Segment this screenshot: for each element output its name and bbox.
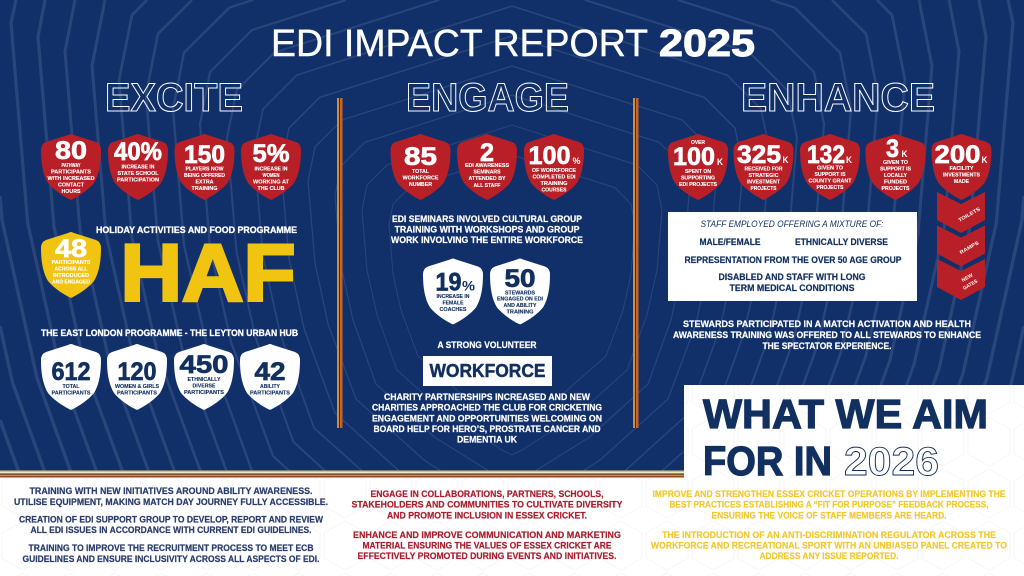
text: stewards [673,319,981,351]
stat: 100% training: COURSES [542,188,567,194]
heading: what we aim for in 2026 [703,391,988,484]
stat: 40% state school: INCREASE IN [122,164,155,170]
stat: 200k: MADE [954,179,970,185]
stat: 450 ethnically diverse: 450 [180,351,228,379]
column dividers [337,98,638,428]
stat: 120 women and girls: WOMEN & GIRLS [115,384,160,390]
heading: what we aim for in 2026: 2026 [844,440,939,484]
title: 2025 [659,23,755,65]
stat: 200k: 200 [934,141,980,169]
staff box [668,212,917,301]
stat: 200k: K [982,155,988,165]
stat: 200k: INVESTMENTS [943,172,981,178]
stat: over 100k: 100 [673,143,715,171]
stat: 19% female coaches: % [462,278,476,294]
stat: 42 ability: ABILITY [260,384,281,390]
stat: 3k: K [902,149,908,159]
text: yellow aims [651,489,1007,561]
heading: enhance: ENHANCE [741,76,935,120]
stat: 19% female coaches: COACHES [440,307,467,313]
chevron: new gates [937,259,985,300]
text: red aims: AND PROMOTE INCLUSION IN ESSEX CRICKET. [387,510,587,520]
text: navy aims: GUIDELINES AND ENSURE INCLUSIVITY ACROSS ALL ASPECTS OF EDI. [22,554,320,564]
stat: 80 pathway participants: WITH INCREASED [48,176,95,182]
stat: 80 pathway participants: PARTICIPANTS [51,170,92,176]
heading: what we aim for in 2026: WHAT WE AIM [703,391,988,437]
text: yellow aims: WORKFORCE AND RECREATIONAL SPORT WITH AN UNBIASED PANEL CREATED TO [651,540,1007,550]
stat: 450 ethnically diverse: DIVERSE [192,384,216,390]
heading: excite: EXCITE [105,76,243,120]
stat: 100% training [524,134,584,200]
stat: 132k: SUPPORT IS [814,172,846,178]
stat: 450 ethnically diverse [174,344,234,410]
stat: 150 players: EXTRA [196,180,214,186]
stat: 19% female coaches: 19 [436,268,462,296]
stat: 325k: PROJECTS [750,186,777,192]
stat: 80 pathway participants: CONTACT [58,182,84,188]
stat: 5% women: WOMEN [262,173,280,179]
stat: 48 participants: ACROSS ALL [54,266,88,272]
stat: 48 participants: AND ENGAGED [52,280,90,286]
chevron: ramps [937,226,985,266]
stat: 3k: GIVEN TO [883,160,908,166]
text: yellow aims: THE INTRODUCTION OF AN ANTI-DISCRIMINATION REGULATOR ACROSS THE [662,530,996,540]
stat: 5% women: 5% [252,140,290,168]
stat: 85 workforce: TOTAL [412,169,429,175]
chevron: toilets [937,192,985,233]
stat: 150 players [174,134,234,200]
stat: 40% state school: PARTICIPATION [117,178,159,184]
stat: 450 ethnically diverse: PARTICIPANTS [184,390,225,396]
text: edi seminars [391,214,583,245]
stripe band [0,470,684,478]
workforce callout [423,356,552,386]
stat: 19% female coaches: FEMALE [442,300,464,306]
text: red aims: ENHANCE AND IMPROVE COMMUNICATION AND MARKETING [353,530,621,540]
stat: 50 stewards: STEWARDS [505,290,536,296]
stat: 132k: 132 [807,141,845,169]
text: yellow aims: ENSURING THE VOICE OF STAFF MEMBERS ARE HEARD. [712,510,946,520]
stat: 5% women: THE CLUB [258,186,285,192]
title: EDI IMPACT REPORT [271,23,648,65]
stat: 612 total [41,344,101,410]
text: navy aims: CREATION OF EDI SUPPORT GROUP TO DEVELOP, REPORT AND REVIEW [19,515,323,525]
workforce callout: WORKFORCE [430,361,546,381]
stat: 48 participants: INTRODUCED [53,273,89,279]
stat: 325k: K [782,155,789,165]
text: navy aims: TRAINING TO IMPROVE THE RECRUITMENT PROCESS TO MEET ECB [28,543,314,553]
HAF wordmark: HAF [120,228,296,318]
stat: 325k [734,134,794,200]
staff box: ETHNICALLY DIVERSE [795,237,888,247]
chevron: ramps: RAMPS [959,240,981,256]
text: red aims [352,489,622,561]
stat: 3k: PROJECTS [882,186,910,192]
stat: 150 players: BEING OFFERED [184,173,225,179]
stat: 132k: COUNTY GRANT [808,178,852,184]
text: charity partnerships: CHARITIES APPROACHED THE CLUB FOR CRICKETING [372,403,602,413]
stat: 5% women: INCREASE IN [254,166,288,172]
panel: excite [41,76,301,410]
text: red aims: ENGAGE IN COLLABORATIONS, PARTNERS, SCHOOLS, [370,489,604,499]
stat: 42 ability [240,344,300,410]
text: red aims: STAKEHOLDERS AND COMMUNITIES TO CULTIVATE DIVERSITY [352,500,622,510]
text: edi seminars: TRAINING WITH WORKSHOPS AND GROUP [394,224,580,234]
heading: what we aim for in 2026: FOR IN [703,438,832,484]
stat: over 100k: EDI PROJECTS [679,182,718,188]
stat: over 100k: OVER [691,140,705,146]
stat: 100% training: TRAINING [540,181,568,187]
text: navy aims [14,486,328,564]
text: charity partnerships: DEMENTIA UK [457,434,518,444]
stat: 100% training: OF WORKFORCE [532,168,577,174]
text: charity partnerships [372,392,602,444]
stat: 3k: LOCALLY [884,173,908,179]
stat: 3k: SUPPORT IS [880,166,912,172]
text: stewards: AWARENESS TRAINING WAS OFFERED TO ALL STEWARDS TO ENHANCE [673,330,981,340]
stat: over 100k [668,134,728,200]
stat: 3k [866,134,926,200]
panel: 2026 aims [0,385,1024,576]
stat: 2 seminars: 2 [480,139,494,167]
text: edi seminars: WORK INVOLVING THE ENTIRE WORKFORCE [391,235,583,245]
stat: 100% training: 100 [528,142,570,170]
stat: 325k: STRATEGIC [748,173,779,179]
stat: 80 pathway participants: HOURS [62,189,81,195]
stat: 100% training: % [572,156,580,166]
stat: 80 pathway participants: 80 [55,137,87,165]
staff box: TERM MEDICAL CONDITIONS [730,283,854,293]
chevron: new gates: NEW [961,272,974,284]
stat: 3k: FUNDED [884,180,907,186]
stat: 19% female coaches: INCREASE IN [436,294,470,300]
stat: 150 players: TRAINING [192,186,218,192]
stat: 325k: 325 [737,141,781,169]
staff box: REPRESENTATION FROM THE OVER 50 AGE GROUP [684,255,902,265]
stat: 132k: GIVEN TO [817,166,843,172]
text: yellow aims: IMPROVE AND STRENGTHEN ESSEX CRICKET OPERATIONS BY IMPLEMENTING THE [652,489,1006,499]
stat: 50 stewards: AND ABILITY [504,303,537,309]
text: stewards: STEWARDS PARTICIPATED IN A MATCH ACTIVATION AND HEALTH [683,319,971,329]
stat: 48 participants: PARTICIPANTS [52,260,91,266]
heading: holiday activities: HOLIDAY ACTIVITIES AND FOOD PROGRAMME [96,225,297,235]
stat: 132k: PROJECTS [816,185,844,191]
stat: over 100k: SUPPORTING [681,176,715,182]
stat: 85 workforce: 85 [404,143,437,171]
stat: 200k: FACILITY [950,166,974,172]
stat: 325k: RECEIVED FOR [744,166,783,172]
stat: 40% state school: 40% [114,138,162,166]
stat: 612 total: 612 [52,358,90,386]
stat: 2 seminars: SEMINARS [474,170,501,176]
stat: 3k: 3 [886,135,899,163]
stat: 19% female coaches [423,258,483,324]
stat: 2 seminars: ATTENDED BY [468,176,506,182]
stat: 85 workforce: WORKFORCE [402,176,439,182]
staff box: DISABLED AND STAFF WITH LONG [718,272,866,282]
stat: 40% state school [108,134,168,200]
stat: 120 women and girls: PARTICIPANTS [117,390,158,396]
stat: 85 workforce [390,134,450,200]
text: stewards: THE SPECTATOR EXPERIENCE. [762,341,892,351]
text: yellow aims: BEST PRACTICES ESTABLISHING A “FIT FOR PURPOSE” FEEDBACK PROCESS, [670,500,988,510]
text: yellow aims: ADDRESS ANY ISSUE REPORTED. [760,551,898,561]
chevron: toilets: TOILETS [958,206,982,224]
heading: east london: THE EAST LONDON PROGRAMME - THE LEYTON URBAN HUB [41,328,298,338]
stat: 612 total: PARTICIPANTS [52,390,91,396]
stat: 50 stewards [490,258,550,324]
text: charity partnerships: BOARD HELP FOR HERO’S, PROSTRATE CANCER AND [374,424,600,434]
stat: 5% women: WORKING AT [253,180,289,186]
stat: 132k: K [846,155,852,165]
stat: 100% training: COMPLETED EDI [532,174,576,180]
stat: 120 women and girls: 120 [118,358,156,386]
text: red aims: MATERIAL ENSURING THE VALUES OF ESSEX CRICKET ARE [362,540,612,550]
stat: 132k [800,134,860,200]
stat: 80 pathway participants: PATHWAY [62,163,81,169]
chevron: new gates: GATES [962,278,979,292]
stat: 50 stewards: ENGAGED ON EDI [497,296,544,302]
text: edi seminars: EDI SEMINARS INVOLVED CULTURAL GROUP [392,214,582,224]
text: charity partnerships: CHARITY PARTNERSHIPS INCREASED AND NEW [384,392,591,402]
stat: 48 participants: 48 [55,235,87,263]
stat: 150 players: PLAYERS NOW [186,166,224,172]
stat: 120 women and girls [107,344,167,410]
panel: enhance [668,76,992,351]
stat: 450 ethnically diverse: ETHNICALLY [188,377,221,383]
stat: 612 total: TOTAL [62,384,80,390]
text: a strong volunteer: A STRONG VOLUNTEER [438,340,537,350]
staff box: STAFF EMPLOYED OFFERING A MIXTURE OF: [700,219,884,229]
stat: 5% women [241,134,301,200]
text: navy aims: TRAINING WITH NEW INITIATIVES AROUND ABILITY AWARENESS. [30,486,312,496]
panel: engage [372,76,602,444]
stat: 2 seminars [457,134,517,200]
stat: 50 stewards: 50 [504,265,536,293]
text: charity partnerships: ENGAGEMENT AND OPPORTUNITIES WELCOMING ON [372,413,602,423]
stat: 150 players: 150 [184,141,225,169]
stat: 50 stewards: TRAINING [506,310,534,316]
stat: 325k: INVESTMENT [747,180,780,186]
stat: 42 ability: PARTICIPANTS [250,390,291,396]
stat: over 100k: SPENT ON [685,169,711,175]
stat: 2 seminars: ALL STAFF [474,183,500,189]
heading: engage: ENGAGE [406,76,569,120]
text: navy aims: ALL EDI ISSUES IN ACCORDANCE WITH CURRENT EDI GUIDELINES. [30,525,312,535]
stat: 2 seminars: EDI AWARENESS [465,163,510,169]
text: navy aims: UTILISE EQUIPMENT, MAKING MATCH DAY JOURNEY FULLY ACCESSIBLE. [14,497,328,507]
stat: 48 participants [41,232,101,298]
staff box: MALE/FEMALE [700,237,760,247]
stat: 40% state school: STATE SCHOOL [118,171,159,177]
text: red aims: EFFECTIVELY PROMOTED DURING EVENTS AND INITIATIVES. [358,551,616,561]
stat: over 100k: K [717,157,723,167]
stat: 80 pathway participants [41,134,101,200]
stat: 42 ability: 42 [254,358,286,386]
stat: 200k [932,134,992,200]
stat: 85 workforce: NUMBER [409,182,432,188]
